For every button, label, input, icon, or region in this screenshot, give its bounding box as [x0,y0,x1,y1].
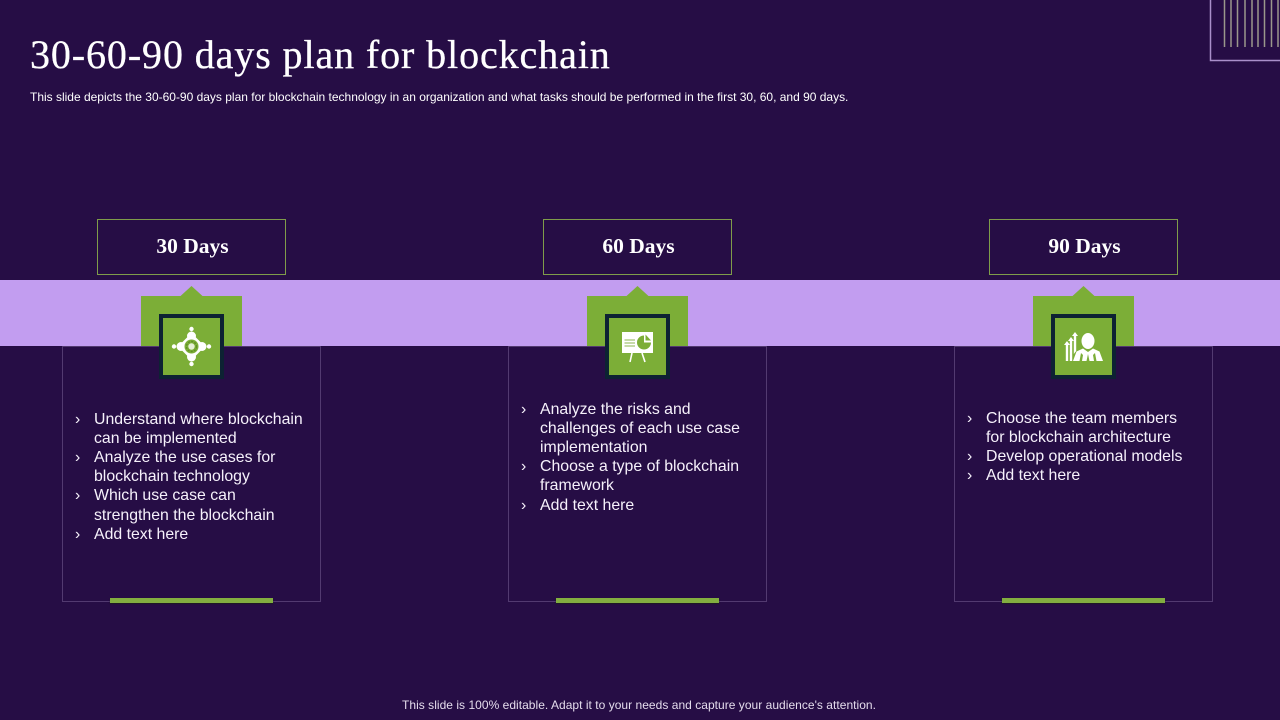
heading: 90 Days: 90 Days [1048,234,1121,258]
corner decoration [1210,0,1280,62]
text block: 30 days tasks: › [75,411,80,428]
panel: 60 days card [508,346,767,602]
text block: 30 days tasks: › [75,526,80,543]
text block: 60 days tasks [521,401,740,514]
heading: 90 Days [989,219,1178,275]
text block: 30 days tasks: can be implemented [94,430,237,447]
title: 30-60-90 days plan for blockchain [30,32,611,77]
text block: 90 days tasks: Develop operational models [986,448,1182,465]
marker tab: 30 days [141,286,242,346]
text block: 60 days tasks: Analyze the risks and [540,401,691,418]
text block: 60 days tasks: › [521,401,526,418]
icon: presentation board with pie chart [605,314,670,379]
heading: 60 Days [543,219,732,275]
text block: 90 days tasks [967,410,1182,484]
text block: 90 days tasks: › [967,410,972,427]
text block: 60 days tasks: implementation [540,439,647,456]
timeline band [0,280,1280,346]
text block: 30 days tasks: › [75,449,80,466]
text block: 60 days tasks: Add text here [540,497,634,514]
heading: 30 Days [97,219,286,275]
accent bar: 60 days [556,598,719,603]
text block: 60 days tasks: challenges of each use case [540,420,740,437]
text block: 90 days tasks: › [967,448,972,465]
text block: 30 days tasks: Which use case can [94,487,236,504]
text block: 60 days tasks: › [521,458,526,475]
marker tab: 60 days [587,286,688,346]
marker tab: 90 days [1033,286,1134,346]
icon: business person with growth arrows [1051,314,1116,379]
text block: 30 days tasks: strengthen the blockchain [94,507,275,524]
subtitle: This slide depicts the 30-60-90 days plan for blockchain technology in an organization and what tasks should be performed in the first 30, 60, and 90 days. [30,90,848,104]
text block: 30 days tasks [75,411,303,543]
text block: 60 days tasks: › [521,497,526,514]
text block: 30 days tasks: Analyze the use cases for [94,449,275,466]
text block: 60 days tasks: framework [540,477,614,494]
text block: 90 days tasks: Choose the team members [986,410,1177,427]
text block: 60 days tasks: Choose a type of blockchain [540,458,739,475]
panel: 30 days card [62,346,321,602]
accent bar: 90 days [1002,598,1165,603]
panel: 90 days card [954,346,1213,602]
text block: 30 days tasks: blockchain technology [94,468,250,485]
text block: 30 days tasks: Add text here [94,526,188,543]
text block: 90 days tasks: Add text here [986,467,1080,484]
text block: 90 days tasks: › [967,467,972,484]
footer note: This slide is 100% editable. Adapt it to your needs and capture your audience's attention. [402,698,876,712]
text block: 30 days tasks: › [75,487,80,504]
text block: 90 days tasks: for blockchain architecture [986,429,1171,446]
heading: 30 Days: 30 Days [156,234,229,258]
icon: network of connected nodes [159,314,224,379]
accent bar: 30 days [110,598,273,603]
heading: 60 Days: 60 Days [602,234,675,258]
text block: 30 days tasks: Understand where blockchain [94,411,303,428]
